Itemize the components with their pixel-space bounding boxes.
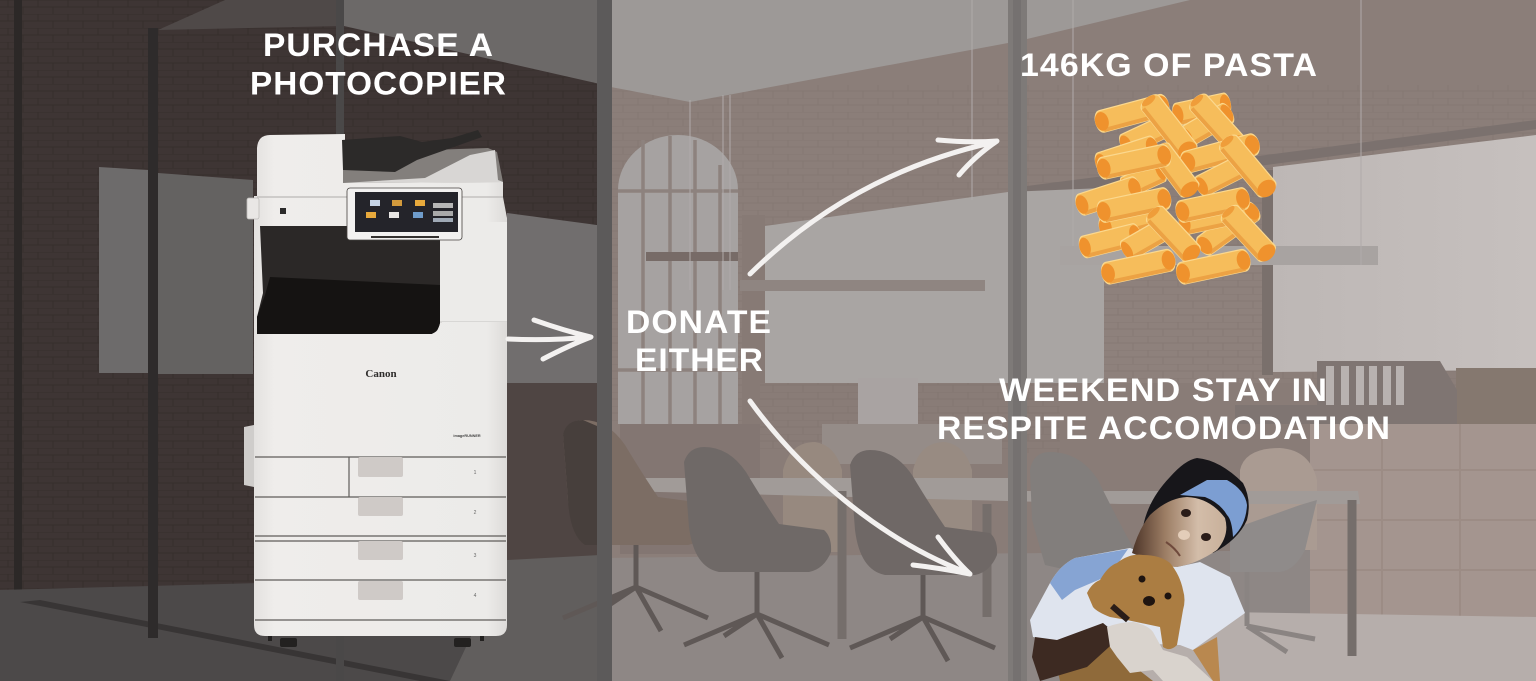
table top (623, 478, 1360, 504)
feet (268, 636, 484, 647)
head band (1180, 480, 1247, 537)
shelf boxes (858, 378, 918, 424)
middle window (742, 215, 765, 425)
arrow: donate to pasta (750, 140, 997, 274)
heading: pasta: 146KG OF PASTA (1020, 47, 1318, 83)
tray numbers: 1 (474, 470, 477, 476)
floor (600, 550, 1536, 681)
heading: respite accommodation: WEEKEND STAY IN (999, 372, 1328, 408)
facial features (1166, 509, 1211, 556)
document feeder (342, 130, 482, 172)
tray numbers (474, 470, 477, 599)
left room wall (0, 0, 600, 600)
foreground chairs (563, 420, 710, 631)
drawer handles (358, 457, 403, 600)
arched window (618, 135, 738, 424)
heading: purchase a photocopier (250, 27, 507, 102)
status label (280, 208, 286, 214)
drawer seams (255, 457, 506, 620)
cabinets (1310, 424, 1536, 617)
output cavity (257, 226, 440, 334)
side bar (247, 198, 259, 219)
right window (1273, 135, 1536, 372)
back chairs (783, 442, 842, 552)
hat (1143, 458, 1249, 553)
heading: purchase a photocopier: PURCHASE A (263, 27, 494, 63)
left arm (1032, 623, 1120, 681)
photocopier illustration (244, 130, 507, 647)
pasta pile icon (1073, 91, 1280, 285)
tray numbers: 4 (474, 593, 477, 599)
scanner top (254, 134, 507, 335)
right wall band (1027, 120, 1536, 197)
brand name: Canon (365, 368, 397, 380)
heading: donate either: DONATE (626, 304, 772, 340)
shirt shadow (1050, 549, 1128, 600)
left floor (0, 555, 600, 681)
binders (1235, 361, 1457, 424)
right arm (1193, 637, 1220, 681)
arrow: copier to donate (508, 320, 591, 359)
heading: respite accommodation: RESPITE ACCOMODATION (937, 410, 1391, 446)
tray numbers: 2 (474, 510, 477, 516)
arrow: donate to accommodation (750, 401, 970, 574)
teddy face (1112, 576, 1172, 620)
right room: wall (600, 0, 1536, 560)
heading: donate either (626, 304, 772, 378)
teddy head (1087, 555, 1184, 649)
side tray (244, 425, 254, 487)
main body (254, 322, 507, 636)
back wall lower (620, 424, 760, 554)
heading: donate either: EITHER (635, 342, 764, 378)
shirt (1030, 548, 1245, 650)
ceiling (600, 0, 1190, 102)
platen cover (343, 148, 503, 183)
left windows (99, 167, 148, 373)
table legs (842, 491, 1352, 656)
child with teddy bear (1030, 458, 1249, 681)
heading: respite accommodation (937, 372, 1391, 446)
heading: purchase a photocopier: PHOTOCOPIER (250, 66, 507, 102)
hands (1107, 622, 1213, 681)
right side block (440, 222, 507, 322)
touch screen (347, 188, 462, 240)
teddy body (1053, 623, 1153, 681)
glass frame posts (148, 28, 158, 638)
tray numbers: 3 (474, 553, 477, 559)
model label: imageRUNNER (453, 434, 481, 438)
hanging lamp (1060, 246, 1378, 265)
face (1132, 497, 1226, 567)
